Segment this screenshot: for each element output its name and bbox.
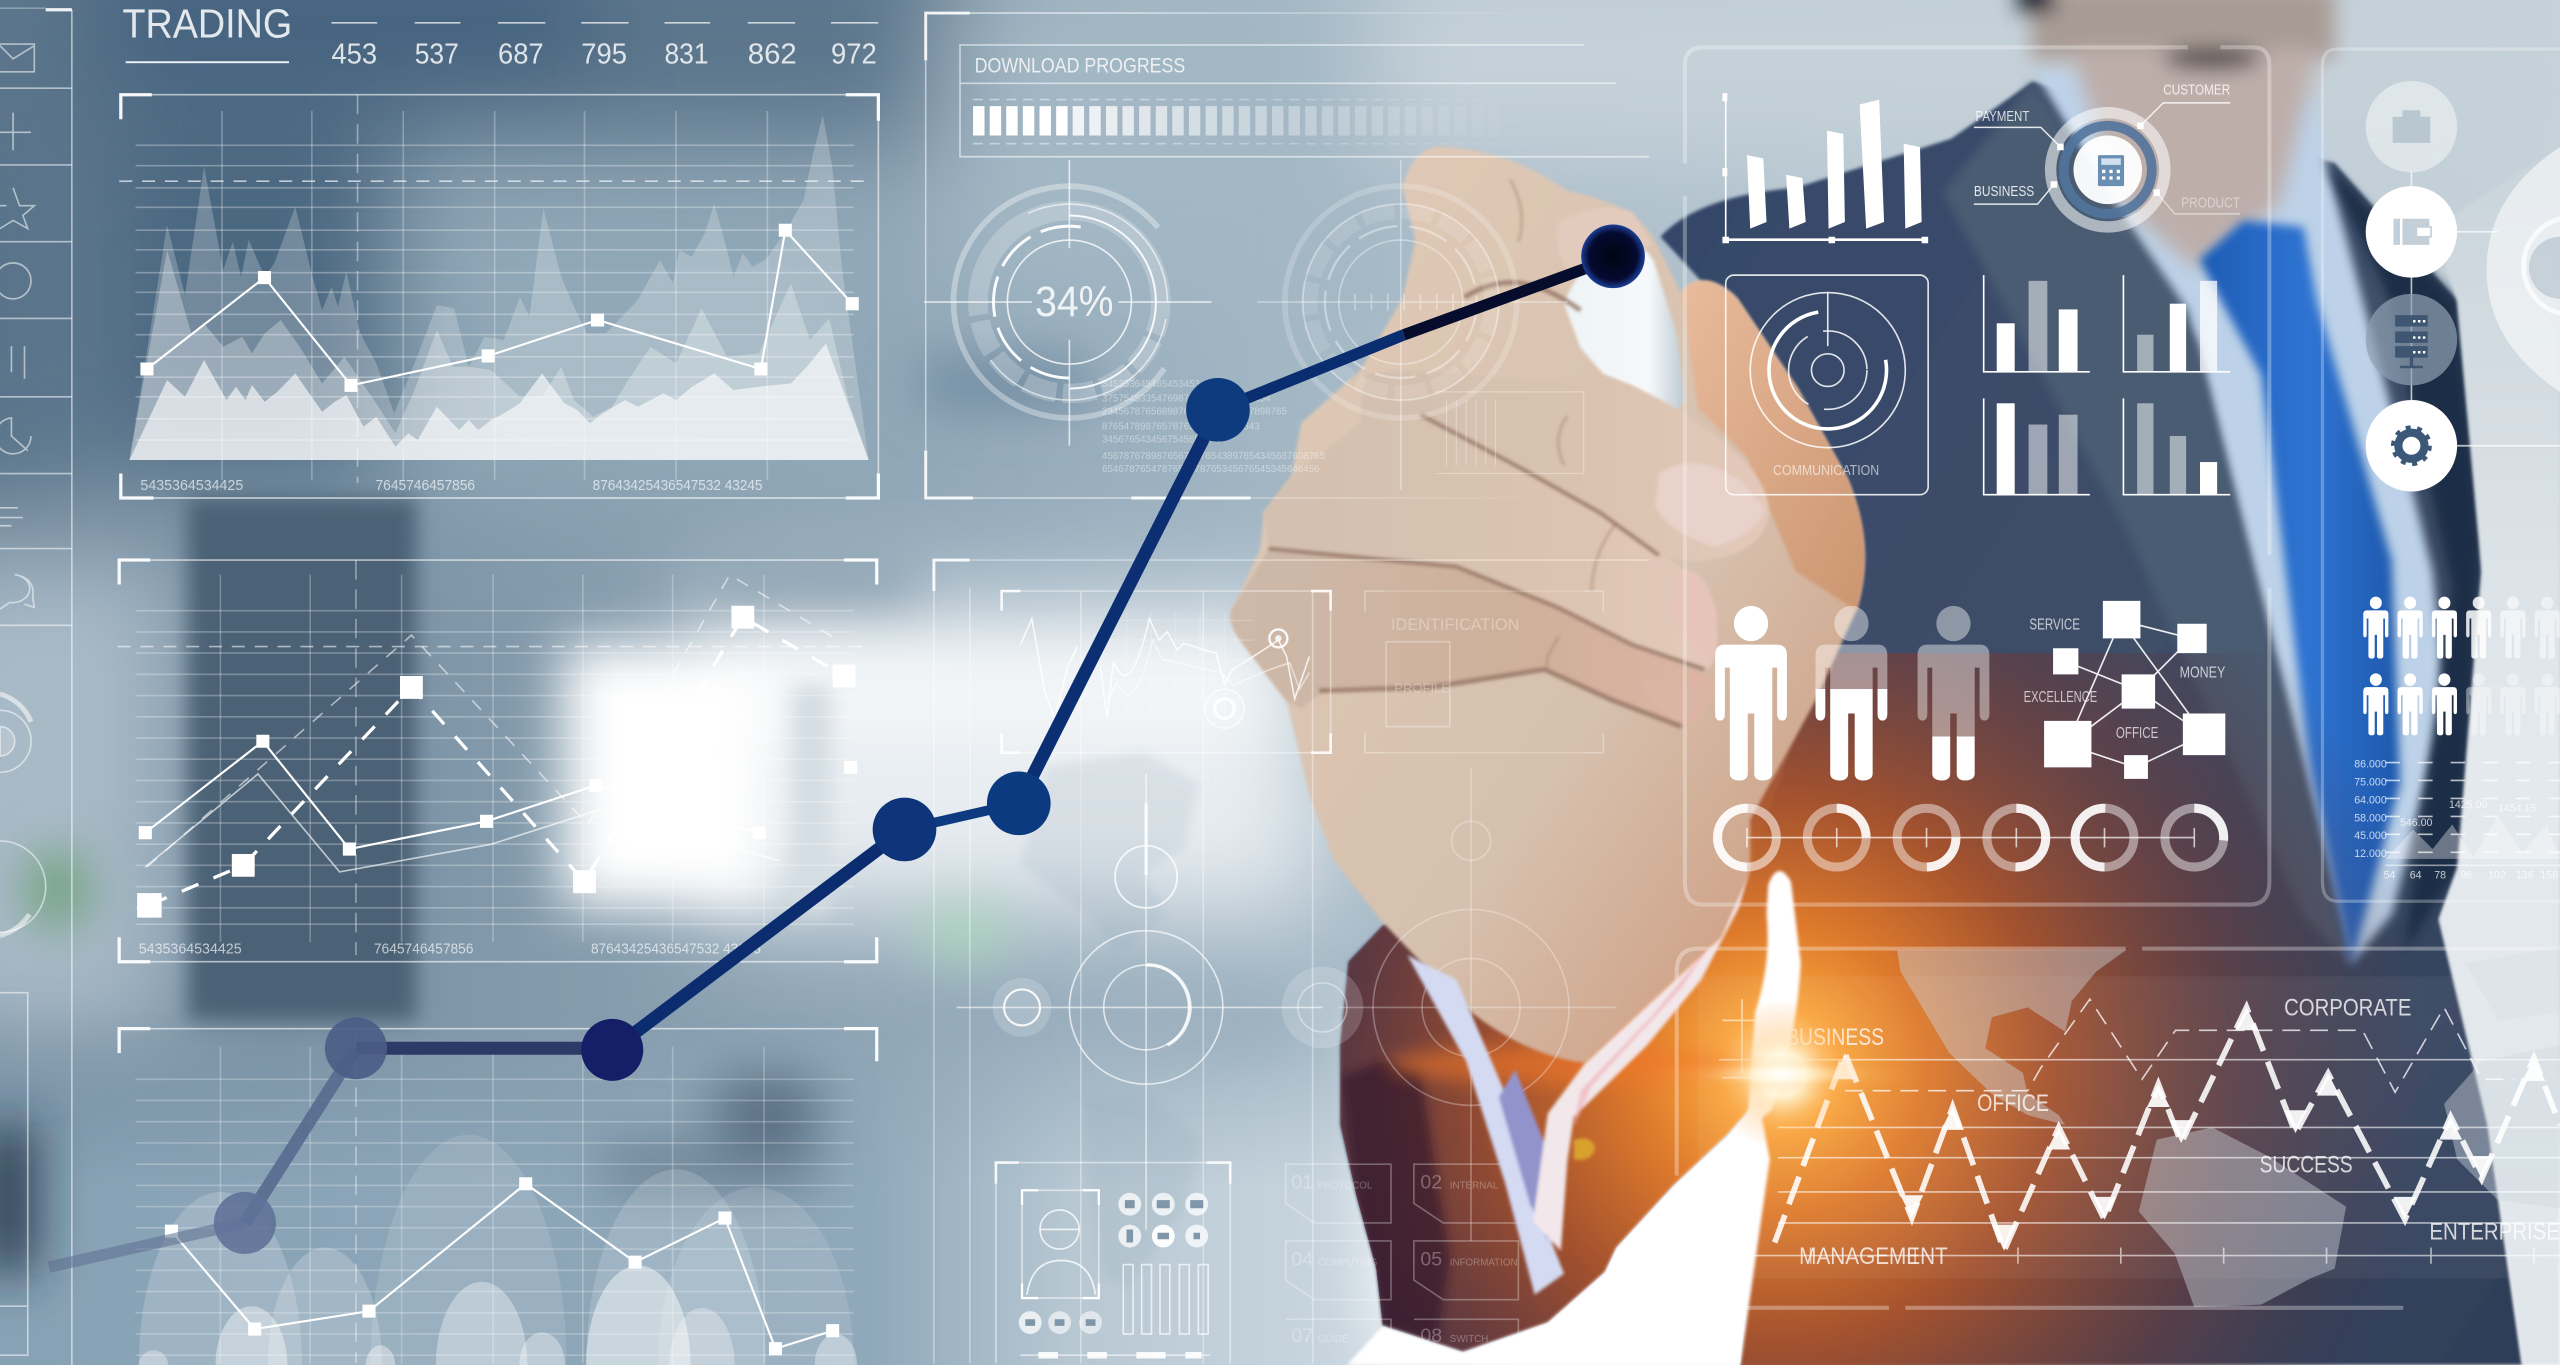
panel: profile and icon controls [996,1163,1230,1363]
axis labels: 7645746457856 [374,941,473,958]
frame [119,560,877,962]
round icon buttons [1019,1193,1208,1334]
small data readout: 45678767898765678976543897654345687608765 [1102,451,1326,462]
icon: list [0,508,23,526]
panel: top right business dashboard [1685,47,2269,905]
palm and fist [1231,147,1864,1063]
icon: plus [0,113,31,150]
small data readout: 87654789876578765567899876543 [1102,421,1260,432]
icon: star [0,188,34,229]
icon: chat bubble [0,575,34,609]
small data readout: 2345678765689876567897654387898765 [1102,407,1288,418]
icon: envelope [0,44,34,72]
people icons [1715,606,1989,780]
panel: multi-line chart [118,560,877,962]
mini area chart: 45.000 [2354,830,2387,842]
index fingertip [1557,208,1652,281]
mini area chart: 86.000 [2354,758,2387,770]
network diagram: EXCELLENCE [2024,689,2097,706]
grid [136,611,854,924]
people grid [2363,597,2560,735]
icon: wallet [2366,186,2457,278]
grid [136,145,854,440]
small data readout: 3456765434567545654345 [1102,434,1222,445]
panel: area and line chart [119,95,878,498]
donut with calculator icon: PAYMENT [1976,109,2029,125]
axis labels: 7645746457856 [376,477,475,494]
frame lines [1677,949,2560,1308]
panel: numbered list: PROTOCOL [1318,1181,1373,1192]
panel: numbered list: 07 [1291,1325,1313,1347]
left icon strip [0,8,72,1365]
panel: identification on the hand: PROFILE [1394,680,1450,695]
large globe [2487,147,2560,392]
profile box [1022,1190,1099,1298]
ticker values: 795 [581,39,627,71]
right lapel [2327,163,2482,950]
axis labels: 5435364534425 [139,941,242,958]
mini area chart: 75.000 [2354,776,2387,788]
waveform box [1002,591,1331,753]
face and neck [2018,0,2335,269]
zigzag arrowheads [1833,1007,2545,1251]
axis labels: 5435364534425 [140,477,243,494]
frame [2322,49,2560,901]
panel: numbered list: 04 [1291,1248,1313,1270]
thick dashed zigzag [1775,1007,2560,1251]
thumb [1682,281,1864,611]
network diagram: MONEY [2180,665,2225,682]
network diagram: OFFICE [2116,725,2158,742]
mini area chart: 78 [2434,869,2446,881]
panel: central waveform and map HUD [934,560,1649,1363]
icon: server [2366,294,2457,385]
panel: numbered list: 08 [1420,1325,1442,1347]
network diagram: SERVICE [2029,616,2080,633]
ticker values: 453 [331,39,377,71]
small data readout: 345353645465453453 [1102,379,1201,390]
slider [1020,1354,1210,1356]
gauge value: 34% [1035,278,1113,325]
thin dashed trend [1845,999,2514,1092]
axis labels [139,941,761,958]
faint world map [1020,751,1200,1290]
panel: right column icons and people [2322,49,2560,901]
panel: numbered list: INFORMATION [1450,1257,1518,1268]
area series [129,115,869,460]
ticker values: 831 [664,39,709,71]
panel: trading header: TRADING [122,1,292,47]
primary series [145,741,759,849]
marker barrel [1564,247,1685,421]
left lapel [1943,82,2351,963]
bar chart with nodes [1722,93,1928,243]
fingernails [1641,463,1765,718]
hand overlay ring [1339,767,1616,1241]
mini area chart: 158 [2540,869,2558,881]
panel: numbered list: GUIDE [1318,1334,1349,1345]
frame lines [934,560,970,591]
communication radar: COMMUNICATION [1773,463,1879,479]
axis labels: 87643425436547532 43245 [591,941,761,958]
small data readout: 6546787654787654678765345676545345646456 [1102,464,1320,475]
progress bar segments [973,106,1499,136]
thin dashed series [147,575,833,867]
mini area chart: 54 [2384,869,2396,881]
mini area chart: 1454.15 [2498,802,2536,814]
ticker values [331,39,877,71]
panel: bubble and line chart [119,1029,877,1365]
pale region right of the suit [2433,147,2560,1365]
ruled lines [1719,999,2560,1264]
panel: world map and zigzag forecast [1677,947,2560,1308]
frame [1685,47,2269,905]
suit jacket [1660,82,2522,1365]
side gauges [0,710,46,932]
donut with calculator icon: PRODUCT [2181,195,2240,211]
axis labels: 87643425436547532 43245 [593,477,762,494]
axis labels [140,477,762,494]
panel: download progress [926,13,1682,498]
level bars [1123,1265,1208,1334]
target circles [957,774,1363,1229]
mini area chart: 12.000 [2354,848,2387,860]
bold dashed series [150,617,844,905]
icon: bars [11,346,24,379]
ticker values: 972 [831,39,877,71]
map labels: OFFICE [1977,1090,2049,1117]
trend line nodes [214,1192,276,1254]
donut with calculator icon [1974,83,2240,227]
icon: pie [0,418,31,454]
secondary series [145,774,779,872]
frame [996,1163,1230,1184]
bubbles [139,1135,857,1365]
communication radar [1726,275,1928,495]
map labels: CORPORATE [2284,995,2411,1022]
ticker values: 687 [498,39,544,71]
small data readout [1102,379,1326,475]
small bar charts [1984,275,2230,495]
outer frame [926,13,1251,498]
mini area chart: 546.00 [2400,817,2433,829]
mini area chart: 102 [2488,869,2506,881]
gauge: 34 percent [908,141,1231,464]
continents [1897,947,2560,1307]
grid [136,1079,854,1355]
icon: briefcase [2366,81,2457,172]
small data readout: 3757545335476987654345789987654 [1102,394,1271,405]
man: suit, shirt, tie and face [1660,0,2560,1365]
mini area chart: 64.000 [2354,794,2387,806]
panel: numbered list: 01 [1291,1172,1313,1194]
panel: numbered list [1286,1164,1518,1363]
panel: identification on the hand: IDENTIFICATION [1391,616,1519,634]
panel: numbered list: INTERNAL [1450,1181,1499,1192]
mini area chart: 1425.00 [2449,799,2487,811]
lens flare [1636,999,1930,1149]
donut with calculator icon: BUSINESS [1974,184,2034,200]
map labels: BUSINESS [1786,1024,1884,1051]
mini area chart: 96 [2460,869,2472,881]
progress box [960,45,1649,157]
hand holding the marker [1231,147,1864,1063]
map labels: MANAGEMENT [1799,1243,1948,1270]
tie [2199,220,2400,967]
map labels [1786,995,2560,1270]
panel: trading header [122,1,878,71]
white shape under the sleeve [1347,1099,1770,1365]
line series [171,1184,833,1349]
marker tip [1581,225,1645,288]
panel: numbered list: SWITCH [1450,1334,1488,1345]
ring finger [1264,415,1718,669]
panel: numbered list: 05 [1420,1248,1442,1270]
waveform traces [1020,619,1309,718]
panel: identification on the hand [1365,392,1603,753]
panel: download progress: DOWNLOAD PROGRESS [975,55,1185,78]
gauge: faint second ring [1257,160,1567,490]
panel: numbered list: COMPUTING [1318,1257,1377,1268]
mini area chart [2354,758,2560,881]
donut row [1718,808,2224,867]
mini area chart: 136 [2516,869,2534,881]
network diagram [2024,601,2225,779]
mini area chart: 58.000 [2354,812,2387,824]
ticker values: 537 [415,39,459,71]
mini area chart: 64 [2410,869,2422,881]
icon: gear [2366,400,2457,491]
frame [121,95,878,498]
map labels: SUCCESS [2260,1151,2353,1178]
finger creases [1269,180,1704,727]
icon: circle [0,263,31,299]
shirt cuff and cufflink [1407,869,1801,1295]
line series [147,230,852,385]
frame [119,1029,877,1061]
middle finger [1360,371,1768,561]
ticker values: 862 [748,39,797,71]
panel: numbered list: 02 [1420,1172,1442,1194]
shirt [2033,69,2446,963]
chart: blue trend line [49,225,1645,1267]
fingers [1231,371,1768,726]
donut with calculator icon: CUSTOMER [2163,83,2230,99]
little finger [1231,549,1715,726]
sleeve and orange light on the suit [1338,653,2391,1365]
